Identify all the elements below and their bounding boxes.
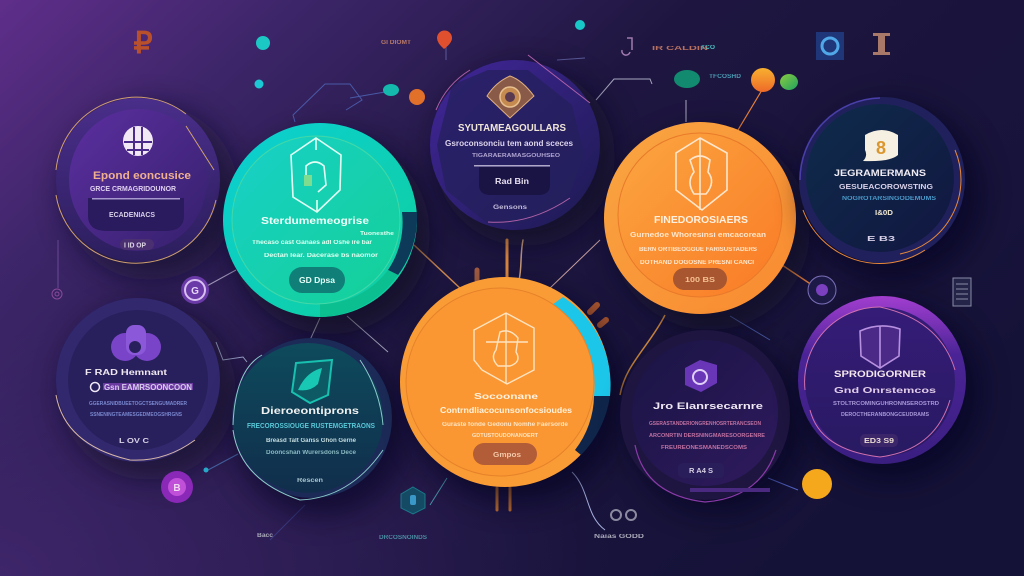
label: TCO bbox=[701, 45, 715, 51]
body: DOTHAND DOGOSNE PRESNI CANCI bbox=[640, 260, 754, 266]
icon: document right bbox=[953, 278, 971, 306]
connector lines bbox=[58, 45, 812, 540]
body bbox=[833, 401, 939, 418]
scattered labels bbox=[257, 40, 742, 541]
icon: purple coin left: G bbox=[191, 286, 199, 297]
subheading: Gnd Onrstemcos bbox=[834, 386, 937, 395]
heading: F RAD Hemnant bbox=[85, 368, 167, 377]
node: teal top bbox=[256, 36, 270, 50]
icon: small spiral left bbox=[52, 289, 62, 299]
node: green ball bbox=[780, 74, 798, 90]
label: L OV C bbox=[119, 438, 149, 445]
pill bbox=[474, 165, 550, 195]
icon: teal hex bottom bbox=[401, 487, 425, 514]
node: orange ball bbox=[751, 68, 775, 92]
icon: purple coin left bbox=[181, 276, 209, 304]
body: I&0D bbox=[875, 210, 893, 217]
label: GI DIOMT bbox=[381, 40, 411, 46]
heading: Jro Elanrsecarnre bbox=[653, 401, 763, 412]
body: GDTUSTOUDONANOERT bbox=[472, 433, 538, 439]
icon: shield hexagon bbox=[676, 138, 727, 210]
panel: dark teal bbox=[232, 338, 406, 516]
body bbox=[266, 438, 357, 456]
body: STOLTRCOMINGUHRONNSEROSTRD bbox=[833, 401, 939, 407]
body: BERN ORTIBEOGGUE FARISUSTADERS bbox=[639, 247, 757, 253]
label: DRCOSNOINDS bbox=[379, 535, 427, 541]
small coloured nodes bbox=[204, 20, 832, 499]
heading: JEGRAMERMANS bbox=[834, 168, 926, 178]
panel: purple top-left bbox=[56, 97, 238, 280]
icon: glasses bottom bbox=[611, 510, 636, 520]
icon: orange glyph top-left: ₽ bbox=[133, 27, 153, 60]
button: I ID OP bbox=[124, 242, 146, 250]
node: teal dot top bbox=[575, 20, 585, 30]
icon: shield hexagon bbox=[474, 313, 534, 384]
subheading: Contrndliacocunsonfocsioudes bbox=[440, 406, 573, 415]
button bbox=[289, 267, 345, 293]
body bbox=[89, 401, 187, 418]
icon: shield hexagon bbox=[291, 138, 341, 212]
inner pill bbox=[88, 198, 184, 231]
subheading: Gsroconsonciu tem aond sceces bbox=[445, 139, 574, 148]
node: red pin bbox=[437, 31, 452, 49]
button bbox=[678, 463, 724, 478]
subheading: FRECOROSSIOUGE RUSTEMGETRAONS bbox=[247, 423, 375, 430]
body text: Thecaso cast Ganaes adl Oshe ire bar bbox=[252, 240, 373, 246]
label: Naias GODD bbox=[594, 534, 645, 540]
heading: SYUTAMEAGOULLARS bbox=[458, 123, 566, 134]
icon: small orb right bbox=[808, 276, 836, 304]
icon: globe badge bbox=[123, 126, 153, 156]
icon: glowing purple coin: B bbox=[173, 483, 181, 494]
node: green oval bbox=[674, 70, 700, 88]
heading: Dieroeontiprons bbox=[261, 406, 360, 417]
button bbox=[120, 239, 154, 250]
node: teal small bbox=[254, 80, 264, 88]
icon: violet hex bbox=[685, 360, 717, 392]
heading: Epond eoncusice bbox=[93, 170, 191, 182]
body bbox=[630, 232, 766, 266]
inner pill: ECADENIACS bbox=[109, 212, 155, 219]
caption: Gensons bbox=[493, 204, 527, 211]
panel: purple lower-left bbox=[56, 298, 236, 480]
orange stems behind centre circle bbox=[477, 240, 606, 510]
body: FREUREONESMANEDSCOMS bbox=[661, 445, 747, 451]
node: amber ball bbox=[802, 469, 832, 499]
button: Gmpos bbox=[493, 452, 521, 459]
body text bbox=[252, 231, 394, 259]
icon: blue square top-right bbox=[816, 32, 844, 60]
panel: orange upper right bbox=[604, 122, 810, 330]
button: GD Dpsa bbox=[299, 276, 336, 285]
panel: navy right bbox=[799, 97, 982, 282]
body: ARCONRTIN DERSNINGMARESOORGENRE bbox=[649, 433, 765, 439]
heading: FINEDOROSIAERS bbox=[654, 215, 748, 226]
body bbox=[442, 422, 569, 439]
panel: teal circle bbox=[223, 123, 430, 334]
body text: Tuonesthe bbox=[360, 231, 394, 237]
icon: speech badge: 8 bbox=[876, 138, 886, 158]
icon: pillar bbox=[873, 33, 890, 55]
body text: Dectan lear. Dacerase bs naomor bbox=[264, 253, 379, 259]
pill: Rad Bin bbox=[495, 177, 529, 186]
icon: small keys top bbox=[622, 38, 632, 55]
icon: diamond badge bbox=[487, 76, 534, 118]
button bbox=[860, 434, 898, 447]
body bbox=[649, 421, 765, 451]
panel: purple top-centre bbox=[430, 55, 615, 246]
body: GESUEACOROWSTING bbox=[839, 184, 934, 191]
icon: purple puzzle bbox=[111, 325, 161, 361]
heading: Sterdumemeogrise bbox=[261, 216, 370, 227]
caption: TIGARAERAMASGOUHSEO bbox=[472, 153, 561, 159]
heading: SPRODIGORNER bbox=[834, 369, 927, 379]
icon: teal shield bbox=[292, 360, 332, 403]
body: Guraste fonde Gedonu Nomhe Faersorde bbox=[442, 422, 569, 428]
icon: glowing purple coin bbox=[161, 471, 193, 503]
panel: dark purple lower right bbox=[620, 330, 804, 514]
label: IR CALDIN bbox=[652, 46, 708, 52]
body: E B3 bbox=[867, 236, 895, 243]
body bbox=[839, 184, 936, 243]
label: Bacc bbox=[257, 533, 274, 539]
icon: violet shield bbox=[860, 326, 900, 368]
body: Gurnedoe Whoresinsi emcacorean bbox=[630, 232, 766, 239]
button bbox=[673, 268, 727, 290]
node: orange small bbox=[409, 89, 425, 105]
node: blue dot bbox=[204, 468, 208, 472]
button: ED3 S9 bbox=[864, 438, 894, 445]
body: Breasd Talt Ganss Ghon Gerne bbox=[266, 438, 357, 444]
body: NOGROTARSINGODEMUMS bbox=[842, 196, 936, 202]
body: SSNENINGTEAMESGEDMEOGSHRGNS bbox=[90, 412, 182, 418]
button bbox=[473, 443, 537, 465]
body: Dooncshan Wurersdons Dece bbox=[266, 450, 357, 456]
body: GSERASTANDERIONGRENHOSRTERANCSEON bbox=[649, 421, 761, 427]
node: teal oval bbox=[383, 84, 399, 96]
subheading: GRCE CRMAGRIDOUNOR bbox=[90, 184, 177, 193]
subheading: Gsn EAMRSOONCOON bbox=[104, 383, 192, 392]
panel: purple lower right bbox=[798, 296, 982, 482]
body: DEROCTHERANBONGCEUDRAMS bbox=[841, 412, 929, 418]
panel: big orange centre bbox=[400, 277, 623, 504]
heading: Socoonane bbox=[474, 391, 538, 401]
caption: Rescen bbox=[297, 478, 323, 484]
button: 100 BS bbox=[685, 277, 715, 284]
body: GGERASNIDBUEETOGCTSENGUMADRER bbox=[89, 401, 187, 407]
label: TFCOSHD bbox=[709, 74, 742, 80]
button: R A4 S bbox=[689, 468, 713, 475]
icon: speech badge bbox=[863, 130, 898, 161]
